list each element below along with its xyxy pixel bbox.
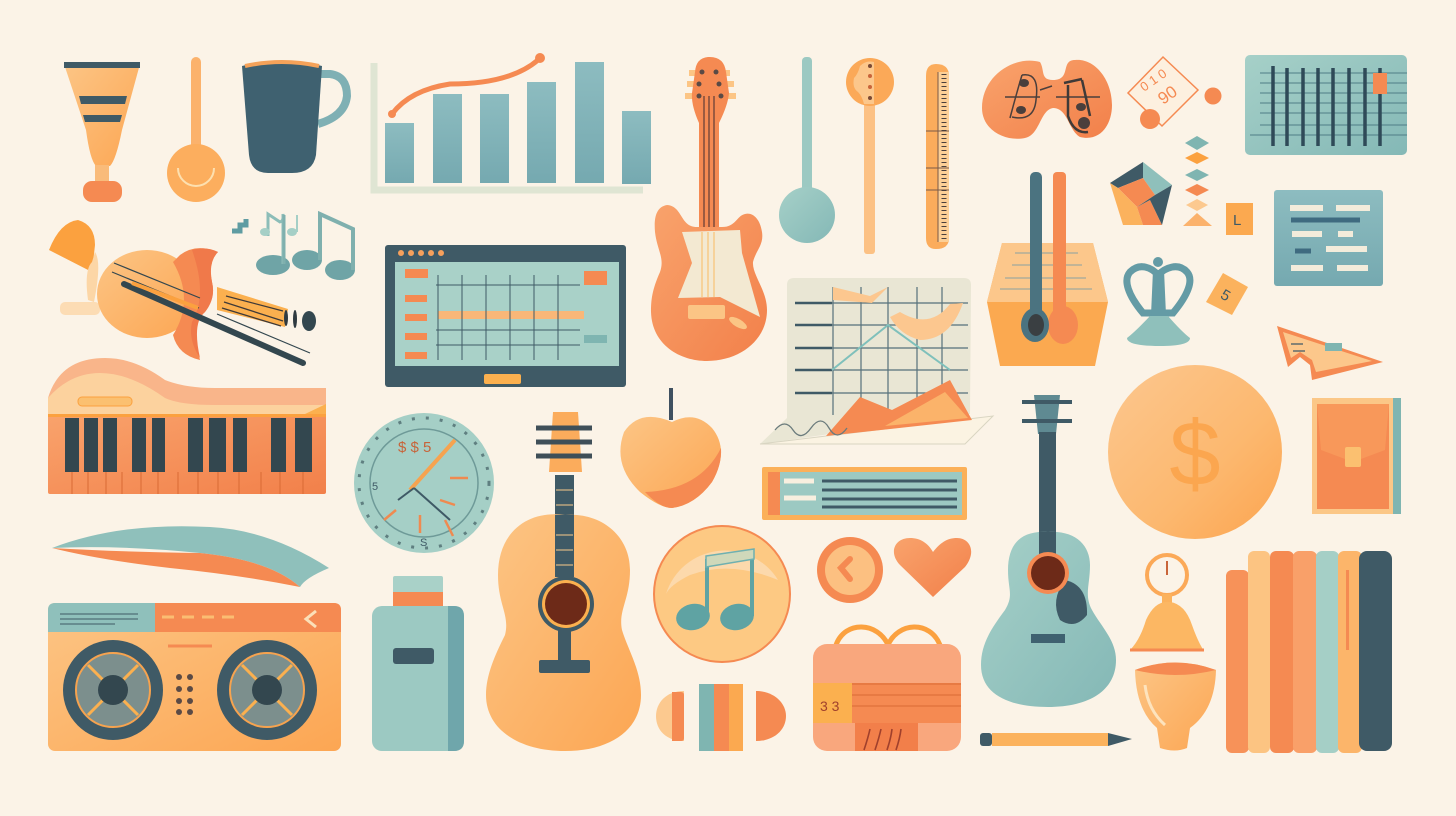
icon: orange spoon [846, 58, 894, 254]
icon: book stack [1226, 551, 1392, 753]
icon: small 5 tile [1206, 273, 1248, 315]
icon: keyboard [48, 358, 326, 494]
icon: pencil [980, 733, 1132, 746]
icon: wallet envelope [1312, 398, 1401, 514]
icon: large acoustic guitar [486, 412, 641, 751]
icon: heart [894, 538, 971, 597]
icon: music note disc [654, 526, 790, 662]
icon: feather swoosh [52, 526, 329, 587]
icon: small L tile: L [1233, 212, 1241, 229]
icon: dollar coin: $ [1169, 403, 1221, 505]
icon: acoustic guitar dark neck [981, 395, 1116, 707]
panel: text lines card [1274, 190, 1383, 286]
icon: small L tile [1226, 203, 1253, 235]
icon: tilted note card [1128, 57, 1222, 129]
icon: violin with bow [49, 220, 316, 363]
icon: tilted note card: 0 1 0 [1137, 66, 1169, 94]
icon: spoon pendulum [167, 57, 225, 202]
icon: trumpet goblet [64, 62, 140, 202]
panel: tablet score screen [385, 245, 626, 387]
icon: box with thermometers [987, 172, 1108, 366]
icon: dollar coin [1108, 365, 1282, 539]
icon: music notes [232, 214, 355, 280]
panel: sheet chart paper [760, 278, 993, 444]
icon: bell with gauge [1130, 555, 1204, 651]
icon: mint pendulum [779, 57, 835, 243]
icon: orange bowl cup [1135, 662, 1216, 750]
icon: tilted note card: 90 [1154, 82, 1181, 108]
icon: small 5 tile: 5 [1218, 286, 1233, 305]
icon: dial clock: S [420, 537, 427, 549]
icon: crown [1127, 257, 1190, 346]
panel: ticket strip [762, 467, 967, 520]
icon: paper plane ticket [1277, 326, 1383, 380]
icon: teal bottle [372, 576, 464, 751]
icon: dial clock [354, 413, 494, 553]
icon: peach [620, 388, 721, 508]
icon: dial clock: 5 [372, 481, 378, 493]
icon: pill segments [656, 684, 786, 751]
icon: orange c button [817, 537, 883, 603]
icon: stacked diamonds [1183, 136, 1212, 226]
icon: geometric cube [1110, 162, 1172, 225]
icon: dial clock: $ $ 5 [398, 439, 431, 456]
icon: electric guitar [651, 57, 767, 361]
icon: handbag radio [813, 627, 961, 751]
icon: handbag radio: 3 3 [820, 698, 840, 714]
icon: music score blob [982, 60, 1112, 139]
icon: boombox [48, 603, 341, 751]
icon: mug [242, 61, 347, 173]
chart: bar chart with trend line [374, 53, 651, 190]
panel: mixer board [1245, 55, 1407, 155]
icon: ruler [926, 64, 949, 249]
